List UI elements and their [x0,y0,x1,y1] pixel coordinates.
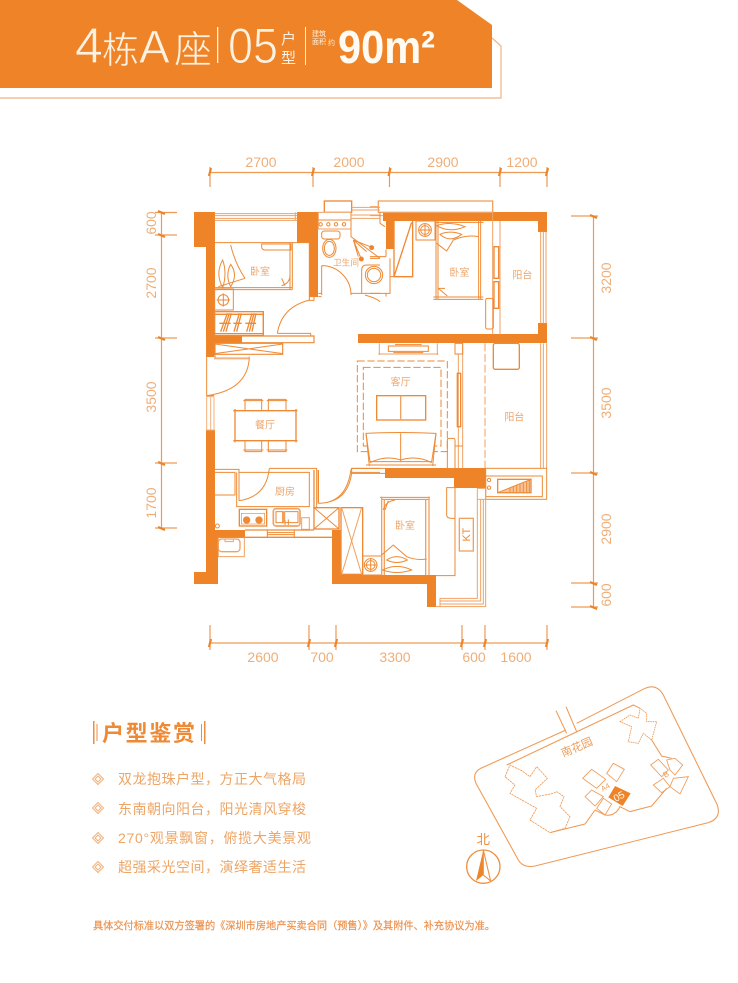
room label: dining: 餐厅 [255,418,275,431]
dimensions: bottom: 3300 [379,649,411,665]
header banner [0,0,501,98]
dimensions: left: 1700 [143,487,159,519]
room label: bathroom: 卫生间 [333,256,359,267]
bay window [436,488,486,607]
dimensions: left [143,211,177,530]
dimensions: bottom [209,625,548,665]
site boundary [475,687,718,867]
washing machine [362,265,383,293]
wardrobe [215,312,263,336]
dimensions: right: 2900 [598,513,614,545]
title: building: 座 [174,30,212,72]
area label: 约 [328,38,335,47]
dimensions: top: 1200 [506,154,538,170]
TV cabinet [378,343,438,355]
bed [433,221,483,299]
room label: bedroom: 卧室 [449,266,469,279]
balcony tub [218,537,244,557]
title: unit type label: 型 [281,50,296,67]
building: central tower: A4 [599,781,612,793]
highlighted unit 05: 05 [612,789,627,805]
dimensions: left: 3500 [143,381,159,413]
dimensions: right: 3200 [598,262,614,294]
area label [312,29,335,47]
area label: 面积 [312,37,326,46]
dining table [233,409,297,442]
area value: 90m² [338,21,435,73]
title: building: 4 [75,18,103,74]
sink [363,556,382,575]
dimensions: left: 600 [143,211,159,235]
kitchen sink [273,509,300,526]
dimensions: top: 2000 [333,154,365,170]
bed [380,497,430,575]
vanity sink [215,289,233,310]
north compass: 北 [477,832,490,847]
building: north-east tower [620,708,657,743]
title: unit type label [281,31,296,67]
upper-left bedroom and storage [215,212,314,358]
stove [239,509,267,526]
room label: bedroom: 卧室 [395,519,415,532]
floor plan [194,201,547,607]
AC platform [486,468,547,499]
wardrobe [341,508,363,574]
lower bedroom [330,468,486,607]
air conditioner unit [459,518,473,551]
sink [416,221,435,240]
title: building: A [139,21,170,73]
sofa [366,432,436,466]
dimensions: top: 2700 [245,154,277,170]
dimensions: top [209,154,548,187]
storage boxes [314,508,339,529]
balcony washer [493,343,519,369]
bullet 1: 双龙抱珠户型，方正大气格局 [118,771,306,787]
site map [467,687,718,883]
site label: 南花园 [559,735,595,760]
dimensions: right: 3500 [598,387,614,419]
feature list [92,771,311,875]
bullet 4: 超强采光空间，演绎奢适生活 [118,859,306,875]
area label: 建筑 [312,29,326,38]
building: east tower [651,758,688,794]
closet [394,221,413,277]
living room [357,343,547,499]
title: building: 栋 [102,30,139,71]
bullet 2: 东南朝向阳台，阳光清风穿梭 [118,801,306,817]
highlighted unit 05 [608,786,631,806]
inner path [507,705,672,833]
dimensions: left: 2700 [143,267,159,299]
building: west wing [505,765,570,833]
road [556,707,577,733]
coffee table [377,396,426,420]
building: central tower [583,763,624,815]
entry shoe cabinet [215,312,314,358]
north compass [467,832,500,883]
dimensions: right: 600 [598,583,614,607]
building: east tower: B [662,769,671,780]
kitchen [214,468,380,557]
entry door [277,297,314,336]
load-bearing walls [194,212,547,607]
dimensions: bottom: 2600 [247,649,279,665]
room label: living room: 客厅 [391,376,411,389]
section heading: 户型鉴赏 [102,721,195,746]
dining area [207,340,297,452]
room label: balcony: 阳台 [512,268,532,281]
room label: bedroom: 卧室 [250,265,270,278]
upper-right bedroom and balcony [370,201,546,334]
title: unit type label: 户 [281,31,296,48]
footer note: 具体交付标准以双方签署的《深圳市房地产买卖合同（预售）》及其附件、补充协议为准。 [93,919,495,932]
dimensions: bottom: 1600 [500,649,532,665]
toilet [322,231,340,257]
dimensions: right [571,215,614,609]
dimensions: top: 2900 [427,154,459,170]
dimensions: bottom: 600 [462,649,486,665]
bathroom [318,201,383,302]
title: unit number: 05 [228,18,278,74]
air conditioner unit: KT [461,527,473,541]
bullet 3: 270°观景飘窗，俯揽大美景观 [118,830,311,846]
room label: balcony: 阳台 [504,411,524,424]
dimensions: bottom: 700 [310,649,334,665]
room label: kitchen: 厨房 [275,485,295,498]
carpet [357,361,447,452]
